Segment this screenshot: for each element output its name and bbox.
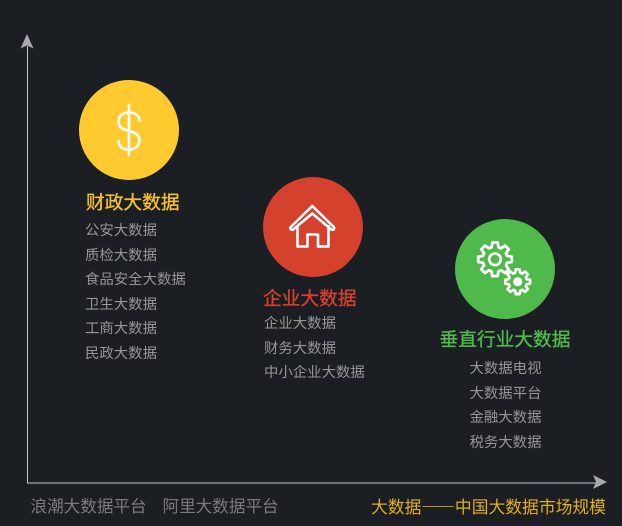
list: 垂直行业 items: [470, 360, 541, 450]
label: 浪潮大数据平台: 浪潮大数据平台: [30, 497, 147, 516]
heading: 垂直行业大数据: 垂直行业大数据: [440, 329, 570, 350]
label: 阿里大数据平台: 阿里大数据平台: [162, 497, 279, 516]
list: 垂直行业 items: 大数据平台: [470, 386, 541, 402]
list: 财政 items: 食品安全大数据: [85, 272, 186, 288]
list: 垂直行业 items: 税务大数据: [470, 434, 541, 450]
list: 财政 items: 工商大数据: [85, 321, 157, 337]
icon: gears in green circle: [455, 219, 555, 319]
list: 垂直行业 items: 金融大数据: [470, 410, 541, 426]
list: 财政 items: 民政大数据: [85, 346, 157, 362]
list: 企业 items: 企业大数据: [264, 316, 336, 332]
list: 企业 items: 中小企业大数据: [264, 365, 365, 381]
heading: 企业大数据: 企业大数据: [263, 288, 357, 309]
vertical axis: [20, 34, 34, 484]
list: 垂直行业 items: 大数据电视: [470, 361, 541, 377]
label: 大数据——中国大数据市场规模: 大数据——中国大数据市场规模: [371, 494, 606, 518]
list: 企业 items: 财务大数据: [264, 340, 336, 356]
list: 财政 items: 卫生大数据: [85, 296, 157, 312]
icon: dollar in yellow circle: [79, 80, 179, 180]
list: 财政 items: 公安大数据: [85, 223, 157, 239]
horizontal axis: [27, 475, 607, 489]
list: 企业 items: [264, 316, 365, 381]
list: 财政 items: [85, 222, 186, 362]
list: 财政 items: 质检大数据: [85, 248, 157, 264]
icon: house in red circle: [263, 177, 363, 277]
heading: 财政大数据: 财政大数据: [86, 192, 180, 213]
